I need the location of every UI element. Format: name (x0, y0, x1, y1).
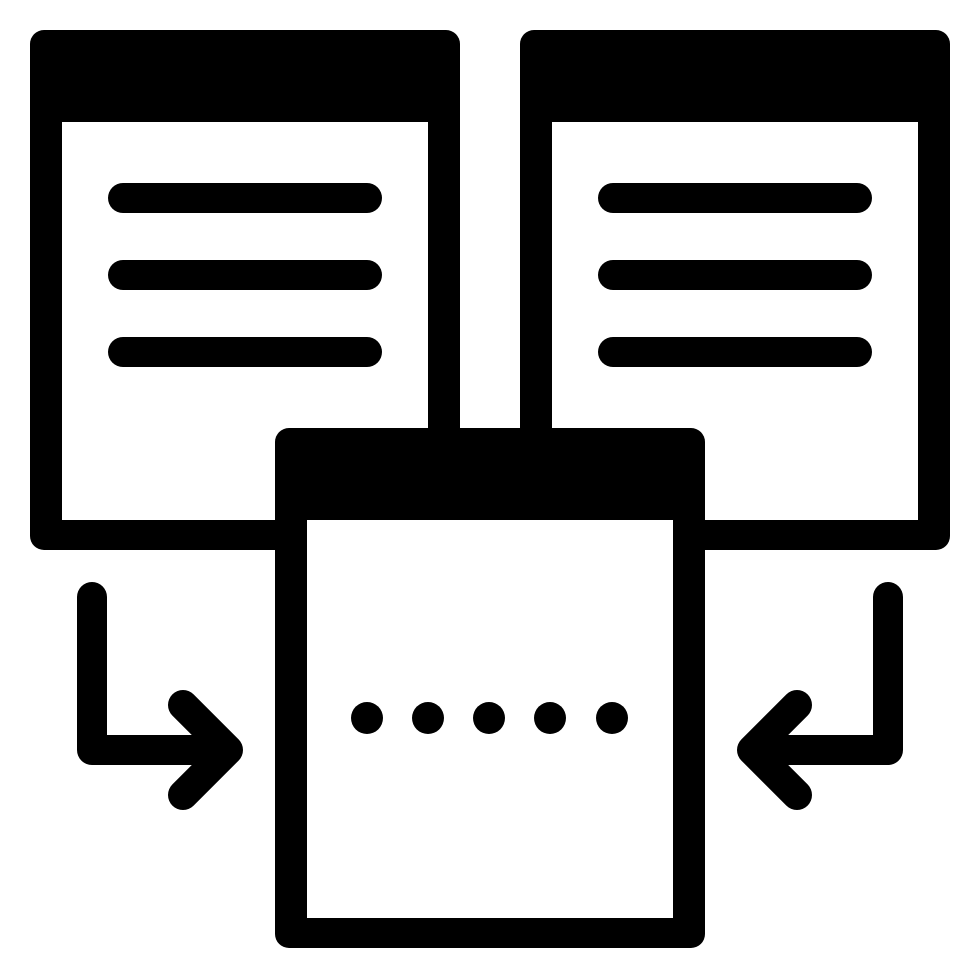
arrow: left into merged (92, 597, 228, 795)
panel: merged document (275, 428, 705, 948)
panel: left document (30, 30, 460, 550)
arrow: right into merged (752, 597, 888, 795)
panel: right document (520, 30, 950, 550)
